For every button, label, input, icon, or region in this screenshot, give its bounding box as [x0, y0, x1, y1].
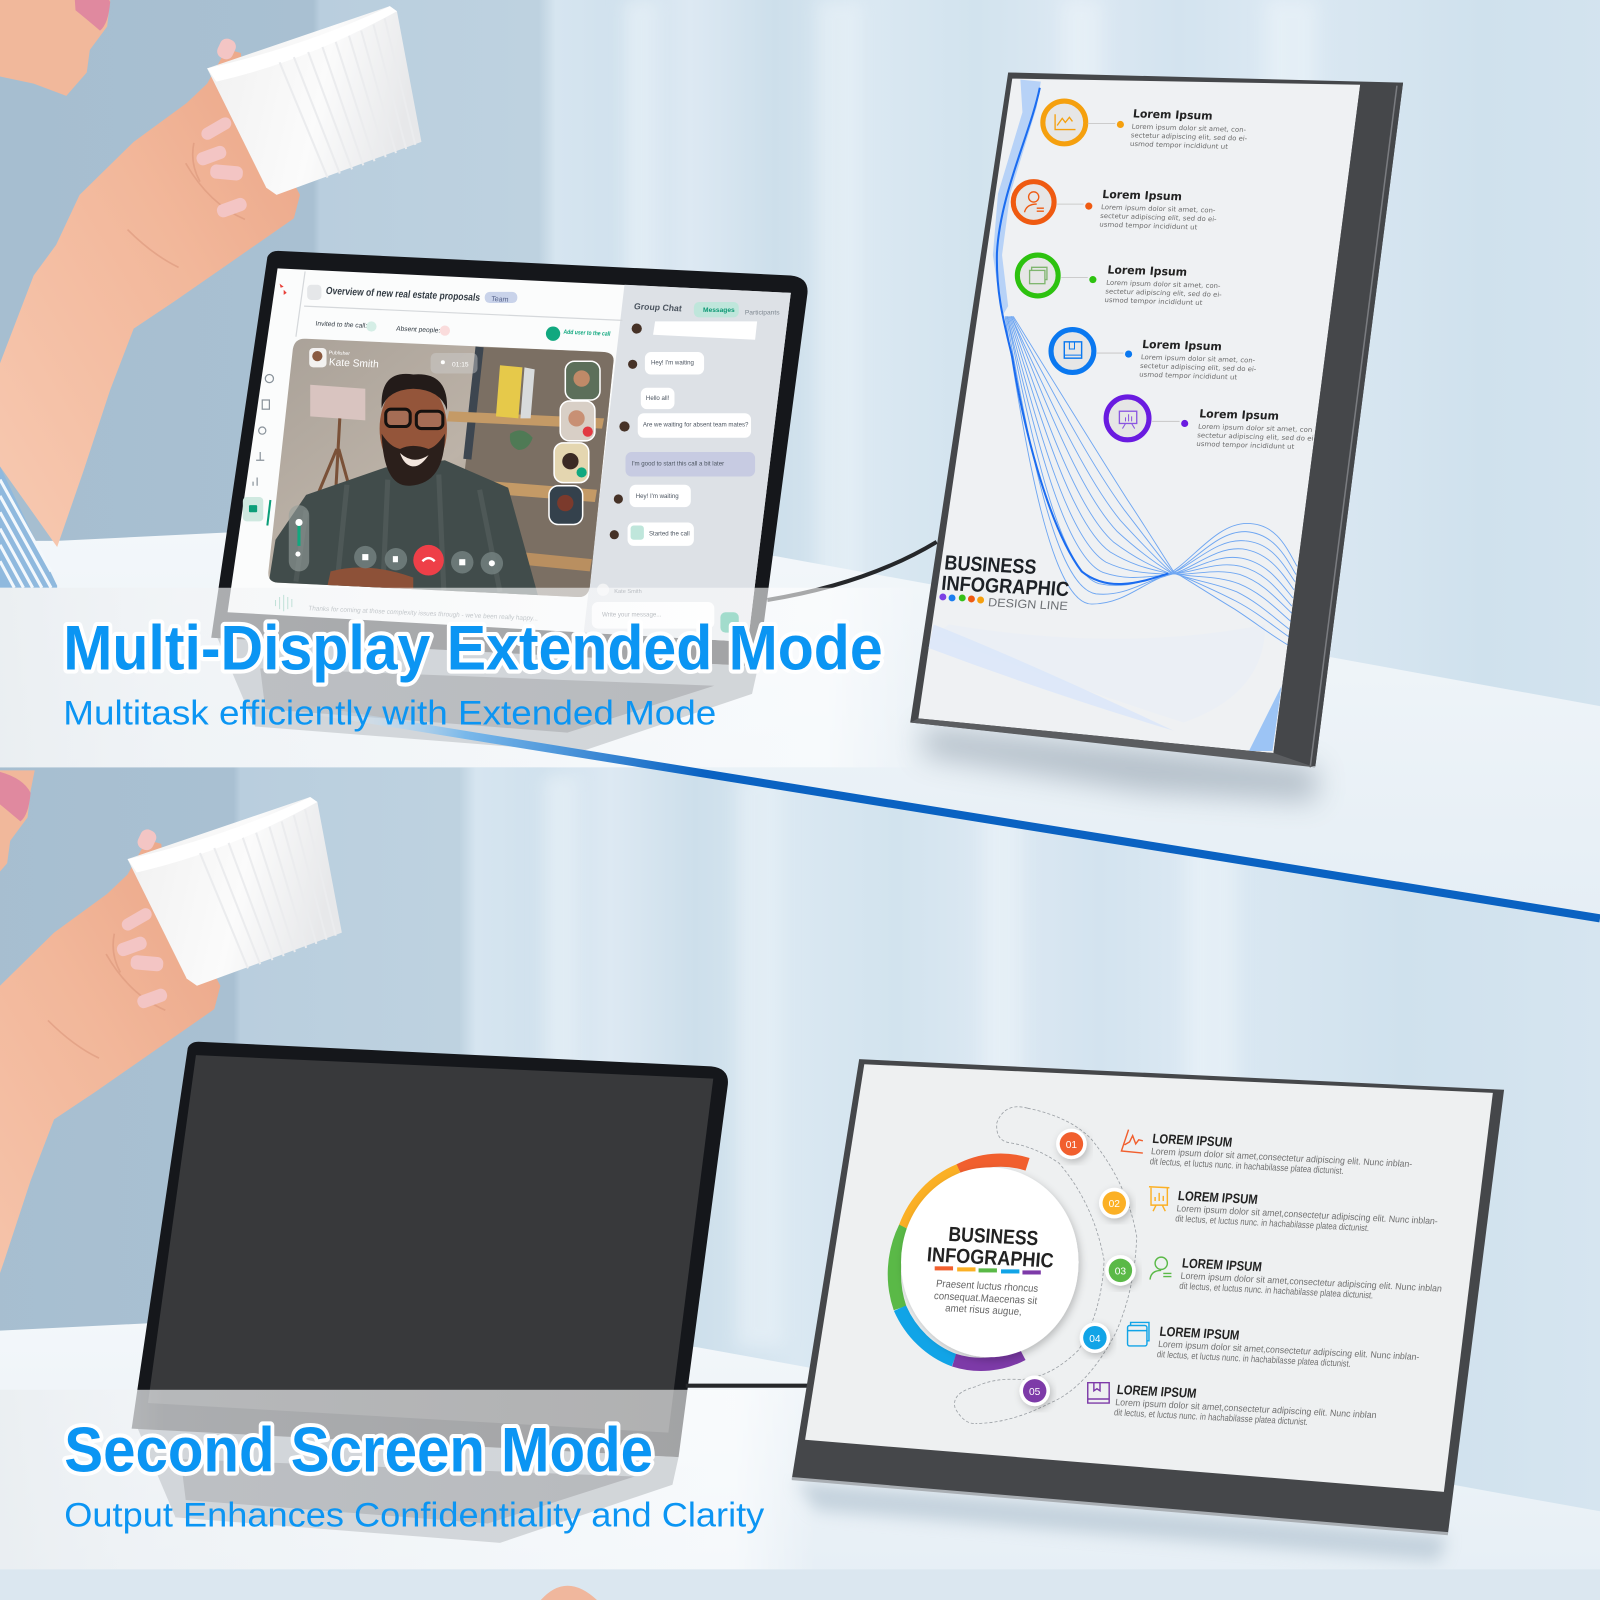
center circle with heading: Praesent luctus rhoncus — [935, 1279, 1039, 1295]
list text 5: dit lectus, et luctus nunc. in hachabilasse platea dictunist. — [1114, 1407, 1309, 1427]
numbered badges — [1019, 1129, 1136, 1406]
item 1 text: usmod tempor incididunt ut — [1130, 140, 1229, 151]
item 3 text: Lorem Ipsum — [1107, 263, 1188, 279]
group chat panel: Started the call — [649, 531, 690, 538]
subheading: extended mode: Multitask efficiently with Extended Mode — [63, 694, 716, 732]
group chat panel: I'm good to start this call a bit later — [632, 460, 724, 467]
item 1 text: Lorem Ipsum — [1132, 107, 1213, 123]
video header text: Add user to the call — [563, 329, 611, 338]
list text 3: LOREM IPSUM — [1181, 1255, 1263, 1274]
video header text: Overview of new real estate proposals — [325, 286, 481, 304]
subheading: second screen mode: Output Enhances Confidentiality and Clarity — [64, 1497, 765, 1535]
monitor shadow — [923, 727, 1316, 801]
item 1 text: Lorem ipsum dolor sit amet, con- — [1131, 123, 1247, 134]
list text 2: dit lectus, et luctus nunc. in hachabilasse platea dictunist. — [1175, 1213, 1370, 1233]
monitor reflection shadow — [796, 1482, 1447, 1561]
band: extended mode caption backdrop — [0, 588, 918, 767]
item 4 text: sectetur adipiscing elit, sed do ei- — [1140, 362, 1257, 373]
video header text: Absent people: — [396, 326, 441, 335]
video header text — [307, 285, 611, 341]
monitor: portrait extended display — [910, 72, 1403, 767]
list text 5: Lorem ipsum dolor sit amet,consectetur adipiscing elit. Nunc inblan — [1115, 1397, 1377, 1420]
heading: Multi-Display Extended Mode: Multi-Display Extended Mode — [63, 613, 883, 683]
caption strip under video — [276, 595, 539, 623]
item 5 text: Lorem Ipsum — [1199, 407, 1280, 423]
item 5 text: usmod tempor incididunt ut — [1196, 440, 1295, 451]
numbered badges: 05 — [1029, 1387, 1041, 1398]
video panel: man on call: Kate Smith — [328, 357, 380, 371]
list text 4: Lorem ipsum dolor sit amet,consectetur adipiscing elit. Nunc inblan- — [1158, 1339, 1420, 1362]
scene: extended mode background with hand and cup — [0, 0, 1600, 918]
video panel: man on call — [260, 332, 622, 602]
list text 5 — [1114, 1382, 1379, 1430]
caption strip under video: Thanks for coming at those complexity issues through - we've been really happy... — [308, 605, 539, 623]
group chat panel: Hey! I'm waiting — [651, 359, 694, 366]
item 4 text: usmod tempor incididunt ut — [1139, 371, 1238, 381]
laptop video call screen — [228, 268, 791, 642]
item 2 text: sectetur adipiscing elit, sed do ei- — [1100, 212, 1218, 223]
scene backdrop: second screen curtains — [0, 767, 1600, 1600]
monitor: landscape second screen — [792, 1059, 1504, 1534]
list text 2: LOREM IPSUM — [1177, 1188, 1259, 1207]
list text 1 — [1149, 1131, 1415, 1179]
screen heading: business infographic design line: INFOGRAPHIC — [940, 572, 1070, 601]
cable: second screen to laptop — [686, 1384, 808, 1388]
participant thumbnails — [549, 361, 600, 524]
laptop dark screen — [148, 1055, 713, 1433]
numbered badges: 04 — [1089, 1334, 1101, 1345]
numbered badges: 02 — [1109, 1199, 1120, 1210]
item 4 text: Lorem Ipsum — [1142, 338, 1222, 353]
list text 2: Lorem ipsum dolor sit amet,consectetur adipiscing elit. Nunc inblan- — [1176, 1203, 1438, 1226]
item 3 text — [1104, 263, 1225, 308]
center circle with heading: amet risus augue, — [945, 1303, 1022, 1318]
numbered badges: 03 — [1115, 1266, 1126, 1277]
group chat panel: Kate Smith — [614, 589, 642, 595]
item 5 text: Lorem ipsum dolor sit amet, con — [1198, 423, 1313, 434]
item 1 text: sectetur adipiscing elit, sed do ei- — [1130, 131, 1248, 143]
center circle with heading — [901, 1167, 1079, 1357]
scene: second screen hand, cup and laptop — [0, 770, 728, 1543]
sidebar icons — [243, 271, 622, 526]
monitor right bezel — [1273, 83, 1403, 766]
list text 4 — [1156, 1324, 1422, 1372]
video header text: Team — [491, 295, 509, 304]
list text 4: dit lectus, et luctus nunc. in hachabilasse platea dictunist. — [1156, 1349, 1351, 1369]
numbered badges: 01 — [1066, 1140, 1077, 1151]
center circle with heading: INFOGRAPHIC — [926, 1243, 1055, 1273]
item 3 circle icon — [1017, 255, 1096, 296]
group chat panel: Participants — [745, 309, 780, 316]
item 2 text: usmod tempor incididunt ut — [1099, 221, 1198, 231]
list icons — [1088, 1130, 1171, 1403]
item 5 circle icon — [1106, 397, 1188, 440]
donut ring segments — [894, 1160, 1028, 1364]
item 4 text: Lorem ipsum dolor sit amet, con- — [1141, 353, 1256, 365]
list text 5: LOREM IPSUM — [1116, 1382, 1197, 1401]
video header text: Invited to the call: — [315, 321, 368, 330]
list text 3 — [1179, 1255, 1444, 1304]
item 4 text — [1139, 338, 1260, 382]
list text 1: LOREM IPSUM — [1152, 1131, 1233, 1150]
item 1 circle icon — [1043, 101, 1124, 144]
group chat panel: Write your message... — [602, 611, 662, 618]
cable: monitor to laptop — [767, 542, 937, 600]
band: second screen caption backdrop — [0, 1390, 816, 1569]
screen heading: business infographic design line: BUSINESS — [943, 551, 1038, 579]
item 5 text: sectetur adipiscing elit, sed do ei — [1197, 431, 1314, 443]
pale swoosh decoration — [929, 624, 1282, 751]
diagonal divider line — [306, 709, 1600, 918]
heading: Second Screen Mode: Second Screen Mode — [64, 1415, 653, 1485]
item 2 text — [1099, 188, 1220, 232]
center circle with heading: consequat.Maecenas sit — [933, 1291, 1038, 1307]
item 5 text — [1196, 407, 1316, 451]
video panel: man on call: 01:15 — [452, 361, 469, 368]
list text 3: dit lectus, et luctus nunc. in hachabilasse platea dictunist. — [1179, 1281, 1374, 1300]
strip: table below second band — [0, 1569, 1600, 1600]
list text 3: Lorem ipsum dolor sit amet,consectetur adipiscing elit. Nunc inblan — [1180, 1271, 1442, 1294]
screen heading: business infographic design line — [939, 551, 1070, 613]
group chat panel: Hello all! — [646, 395, 670, 402]
item 3 text: usmod tempor incididunt ut — [1104, 296, 1203, 307]
video panel: man on call: Publisher — [328, 350, 351, 357]
item 2 circle icon — [1013, 182, 1092, 222]
item 2 text: Lorem Ipsum — [1102, 188, 1183, 203]
list text 1: dit lectus, et luctus nunc. in hachabilasse platea dictunist. — [1149, 1156, 1344, 1176]
center circle with heading: BUSINESS — [948, 1223, 1039, 1250]
group chat panel: Hey! I'm waiting — [636, 493, 679, 500]
group chat panel: Are we waiting for absent team mates? — [643, 422, 749, 429]
item 3 text: sectetur adipiscing elit, sed do ei- — [1105, 287, 1223, 299]
item 4 circle icon — [1051, 330, 1132, 372]
item 3 text: Lorem ipsum dolor sit amet, con- — [1106, 279, 1222, 290]
list text 2 — [1175, 1188, 1440, 1236]
list text 1: Lorem ipsum dolor sit amet,consectetur adipiscing elit. Nunc inblan- — [1150, 1146, 1413, 1169]
group chat panel — [592, 301, 780, 633]
item 2 text: Lorem ipsum dolor sit amet, con- — [1101, 203, 1216, 215]
screen heading: business infographic design line: DESIGN LINE — [987, 596, 1068, 613]
group chat panel: Group Chat — [633, 301, 683, 313]
list text 4: LOREM IPSUM — [1159, 1324, 1240, 1343]
wave graphic — [993, 80, 1297, 645]
group chat panel: Messages — [703, 307, 735, 314]
item 1 text — [1130, 107, 1251, 151]
dashed connector arcs — [955, 1107, 1137, 1424]
